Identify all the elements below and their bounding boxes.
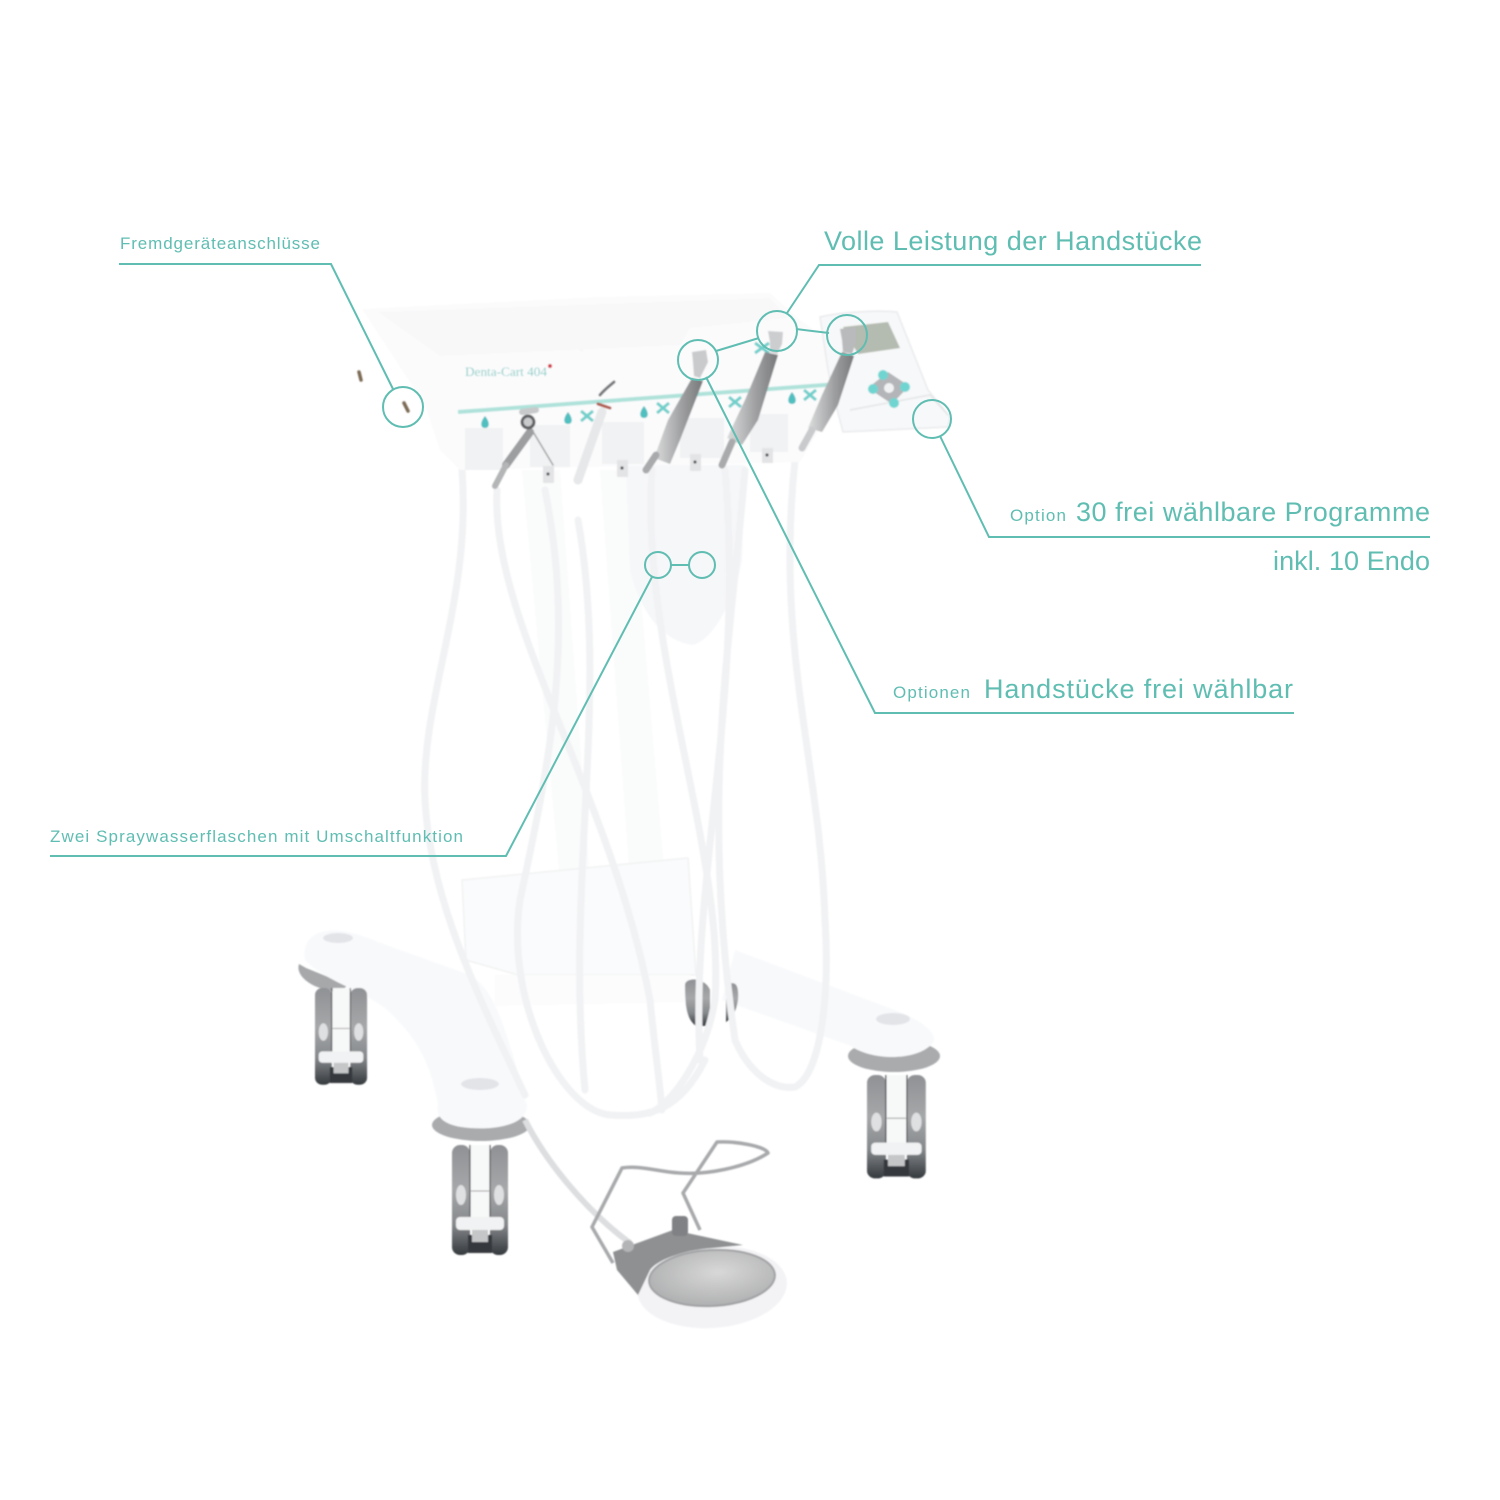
caster ring: right xyxy=(848,1040,940,1072)
ring: programme xyxy=(913,400,951,438)
handpiece 1 xyxy=(495,410,553,486)
mounting post xyxy=(622,1240,634,1252)
pedal bracket xyxy=(613,1230,743,1295)
ring: bottle 1 xyxy=(645,552,671,578)
ring: connector xyxy=(383,387,423,427)
label: Zwei Spraywasserflaschen: Zwei Spraywasserflaschen mit Umschaltfunktion xyxy=(50,827,463,846)
label: Fremdgeräteanschlüsse: Fremdgeräteanschlüsse xyxy=(120,234,320,253)
side connectors xyxy=(359,372,408,411)
callout lines and rings xyxy=(50,264,1430,856)
handpiece 2 xyxy=(578,382,614,480)
handpiece 3 xyxy=(646,350,708,470)
leader: Fremdgeräteanschlüsse xyxy=(119,264,393,389)
label: Option: Option xyxy=(1010,506,1066,525)
rear caster xyxy=(685,980,738,1026)
tray body xyxy=(362,293,835,470)
ring: handpiece 5 xyxy=(827,315,867,355)
small holders xyxy=(543,448,773,483)
columns xyxy=(522,470,665,880)
pedal base xyxy=(634,1241,790,1333)
tray handle xyxy=(572,310,689,352)
caster ring: left xyxy=(298,964,348,992)
lower basket xyxy=(462,858,696,975)
logo dot xyxy=(548,364,552,368)
caster: front xyxy=(452,1145,508,1255)
holder dots xyxy=(546,453,769,476)
panel icons: fans xyxy=(581,343,816,421)
base center xyxy=(495,975,690,1006)
handpiece 4 xyxy=(722,331,783,465)
knob xyxy=(672,1216,688,1236)
label: 30 frei wählbare Programme: 30 frei wählbare Programme xyxy=(1076,497,1430,527)
foot pedal cable xyxy=(525,1120,630,1243)
control panel xyxy=(820,311,950,432)
caster: left xyxy=(315,988,367,1085)
leader: Spraywasser xyxy=(50,577,652,856)
pedal wire xyxy=(592,1142,768,1263)
leader: Volle Leistung xyxy=(787,265,1201,313)
caster: right xyxy=(867,1075,926,1178)
ring: handpiece 4 xyxy=(757,311,797,351)
connector: bottles xyxy=(671,564,689,566)
label: Volle Leistung der Handstücke: Volle Leistung der Handstücke xyxy=(824,226,1202,256)
keypad xyxy=(868,372,909,404)
hoses xyxy=(425,460,826,1116)
tray inner xyxy=(378,298,788,356)
product logo: Denta-Cart 404 xyxy=(465,364,547,379)
connector: rings xyxy=(716,329,829,351)
label: Handstücke frei wählbar: Handstücke frei wählbar xyxy=(984,674,1293,704)
label: inkl. 10 Endo: inkl. 10 Endo xyxy=(1273,546,1430,576)
display xyxy=(843,322,900,354)
handpiece 5 xyxy=(802,327,856,448)
leader: Programme xyxy=(940,436,1430,537)
base frame: right arm xyxy=(722,950,934,1057)
base frame: left arm xyxy=(305,931,527,1128)
pedal disc xyxy=(648,1247,776,1309)
cart illustration xyxy=(298,293,950,1333)
ring: bottle 2 xyxy=(689,552,715,578)
panel icons: drops xyxy=(481,392,796,428)
holder blocks xyxy=(465,414,788,470)
teal strip xyxy=(458,384,838,412)
foot pedal xyxy=(592,1142,790,1333)
leader: Handstücke xyxy=(706,377,1294,713)
panel inner edge xyxy=(850,395,948,415)
label: Optionen: Optionen xyxy=(893,683,970,702)
mounting pads xyxy=(323,933,910,1090)
ring: handpiece 3 xyxy=(678,340,718,380)
caster ring: front xyxy=(432,1109,530,1141)
water bottles xyxy=(626,465,745,645)
